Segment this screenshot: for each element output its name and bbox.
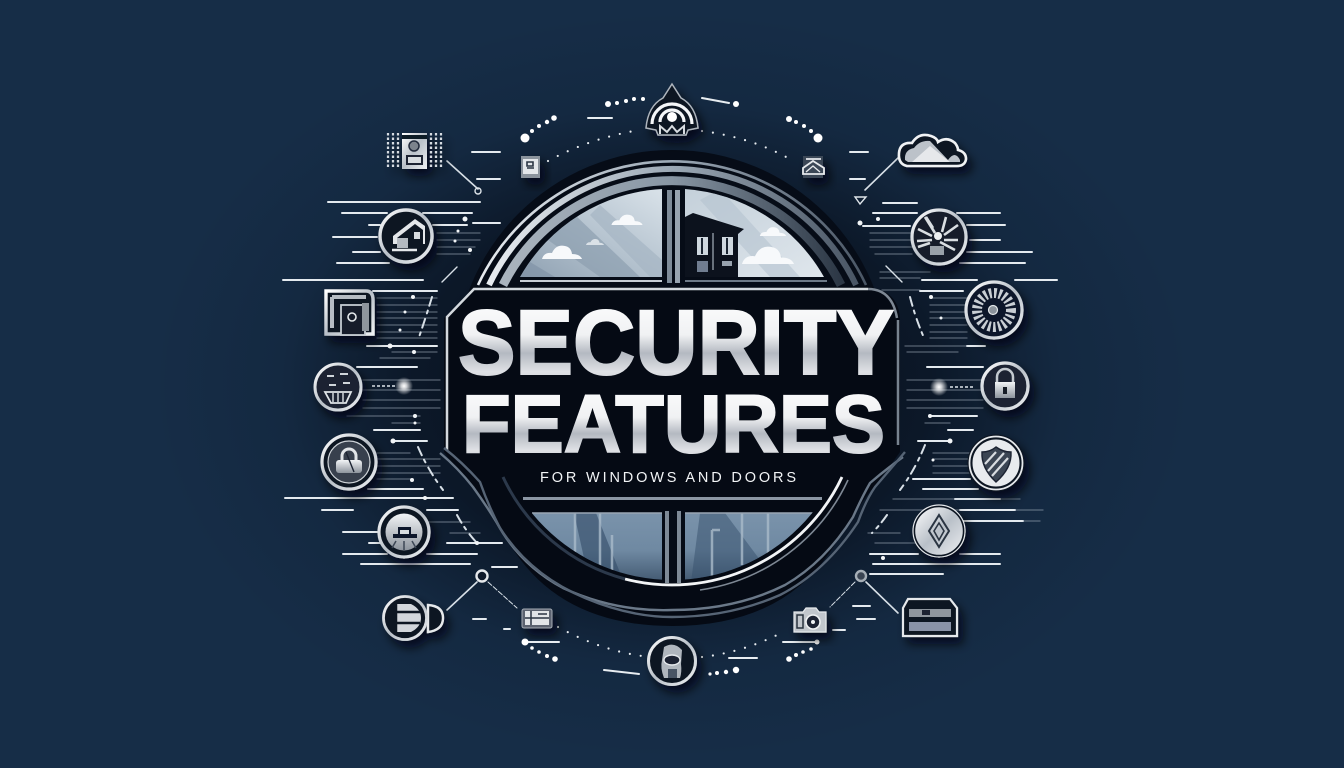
title: SECURITY xyxy=(458,292,894,394)
icon: small panel xyxy=(522,609,552,628)
icon: house badge xyxy=(380,210,432,262)
icon: padlock badge right xyxy=(982,363,1028,409)
icon: camera badge bottom xyxy=(648,638,696,684)
icon: intercom panel xyxy=(388,133,441,169)
subtitle: FOR WINDOWS AND DOORS xyxy=(540,470,796,486)
glow points xyxy=(372,216,975,560)
icon: small envelope xyxy=(803,156,824,178)
icon: door frame xyxy=(326,291,373,335)
window frame rings xyxy=(478,161,866,285)
lower window arcs xyxy=(503,477,848,590)
icon: circuit sun badge xyxy=(912,210,966,264)
plaque border xyxy=(447,289,898,450)
lower window bar xyxy=(523,497,822,500)
icon: toolbox xyxy=(903,599,957,636)
icon: cloud xyxy=(899,135,966,166)
building xyxy=(685,213,744,277)
black plaque silhouette xyxy=(444,150,900,626)
clouds xyxy=(542,215,794,264)
plaque lower contour lines xyxy=(440,448,905,617)
upper window panes xyxy=(520,189,824,277)
icon connector lines xyxy=(418,157,925,613)
icon: plug xyxy=(384,596,443,640)
icon: camera xyxy=(794,608,826,632)
central badge xyxy=(440,150,905,626)
icon: wifi tower xyxy=(646,84,698,135)
icon: machine badge xyxy=(379,507,429,557)
connector nodes xyxy=(475,188,866,582)
lower mullion xyxy=(662,510,685,586)
icon: small document xyxy=(521,156,540,178)
centre mullion and sills xyxy=(520,190,827,283)
icon: diamond badge xyxy=(913,505,965,557)
icon: gauge badge xyxy=(315,364,361,410)
icon: shield badge xyxy=(970,436,1022,490)
icon: padlock badge left xyxy=(322,435,376,489)
top and bottom dotted arcs xyxy=(520,97,822,676)
lower window panes xyxy=(532,512,813,580)
infographic canvas xyxy=(282,82,1058,699)
title: FEATURES xyxy=(462,379,885,470)
title xyxy=(458,292,894,470)
icon: gear dial badge xyxy=(966,282,1022,338)
